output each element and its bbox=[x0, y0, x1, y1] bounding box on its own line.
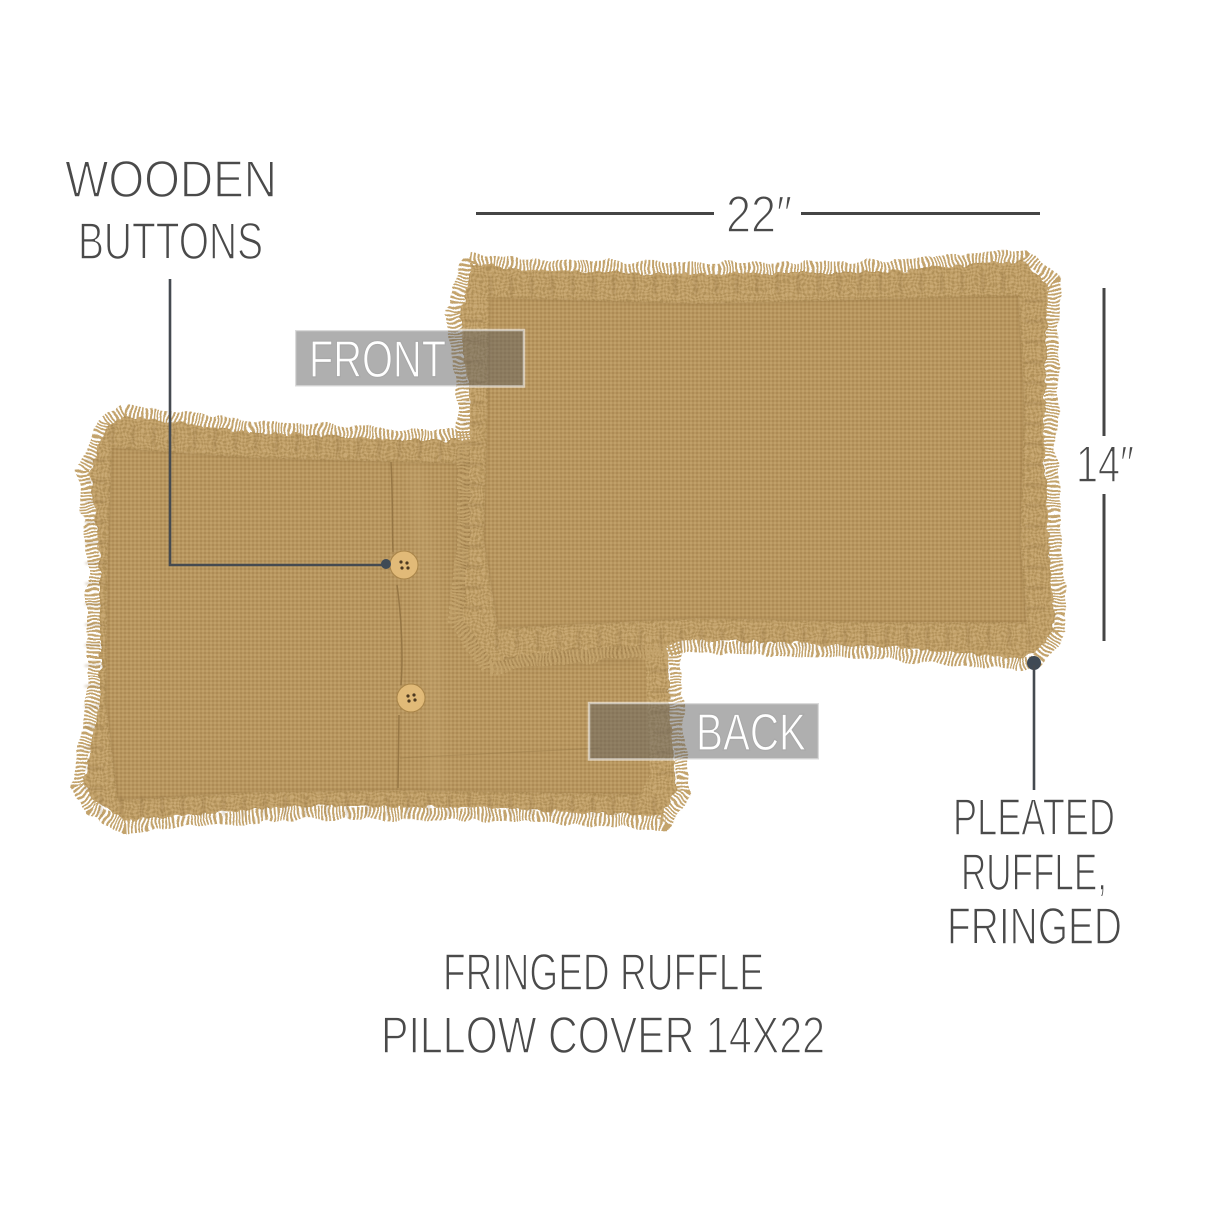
title: PILLOW COVER 14X22 bbox=[381, 1007, 825, 1065]
leader line bbox=[1033, 665, 1035, 790]
label: FRONT: FRONT bbox=[309, 331, 446, 389]
panel: front of pillow bbox=[454, 256, 1060, 668]
back pillow body bbox=[106, 448, 650, 800]
leader dot bbox=[381, 559, 391, 569]
callout text: wooden buttons bbox=[65, 151, 277, 271]
callout: wooden buttons bbox=[65, 151, 391, 569]
callout: pleated ruffle, fringed bbox=[947, 656, 1122, 956]
leader line to button bbox=[170, 279, 386, 565]
front pillow inner seam shadow bbox=[484, 296, 1026, 628]
front pillow ruffle bbox=[460, 260, 1054, 662]
label: BACK bbox=[589, 703, 819, 762]
back pillow ruffle bbox=[84, 416, 678, 820]
callout text: pleated ruffle, fringed bbox=[947, 789, 1122, 956]
back pillow fringe threads bbox=[78, 412, 684, 826]
panel: back of pillow bbox=[78, 412, 684, 826]
icon: wooden button upper bbox=[390, 551, 418, 579]
front pillow body bbox=[484, 296, 1026, 628]
icon: wooden button lower bbox=[397, 684, 425, 712]
dimension: width 22 inches: 22″ bbox=[726, 186, 792, 244]
label: BACK: BACK bbox=[696, 704, 806, 762]
back pillow pleats bbox=[94, 434, 668, 806]
callout text: pleated ruffle, fringed: FRINGED bbox=[947, 898, 1122, 956]
back pillow placket band bbox=[415, 465, 436, 790]
title bbox=[381, 944, 825, 1065]
back pillow inner seam shadow bbox=[106, 448, 640, 800]
dimension: height 14 inches: 14″ bbox=[1076, 436, 1134, 494]
callout text: pleated ruffle, fringed: PLEATED bbox=[953, 789, 1115, 847]
title: FRINGED RUFFLE bbox=[443, 944, 764, 1002]
callout text: pleated ruffle, fringed: RUFFLE, bbox=[961, 844, 1107, 902]
callout text: wooden buttons: WOODEN bbox=[65, 151, 277, 209]
back pillow placket seam bbox=[391, 462, 402, 788]
front pillow pleats bbox=[472, 282, 1036, 640]
leader dot bbox=[1027, 656, 1041, 670]
shadow under front pillow bbox=[454, 450, 640, 668]
front pillow fringe threads bbox=[454, 256, 1060, 668]
callout text: wooden buttons: BUTTONS bbox=[78, 213, 263, 271]
